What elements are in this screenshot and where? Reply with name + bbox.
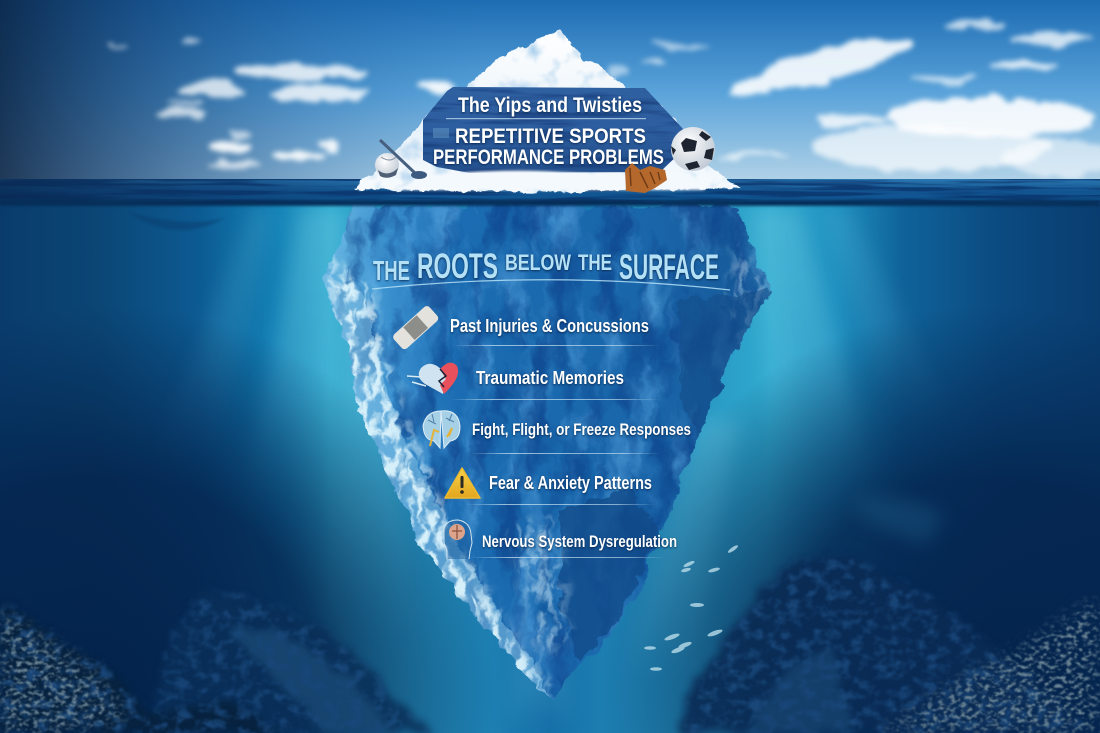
item: Fear and Anxiety Patterns: Fear & Anxiety Patterns [489,473,652,493]
water surface band [0,179,1100,206]
title: The Yips and Twisties: The Yips and Twisties [458,94,642,117]
heading: Repetitive Sports Performance Problems: PERFORMANCE PROBLEMS [433,146,664,169]
icon: baseball glove [625,163,667,193]
sky background [0,0,1100,185]
heading: The Roots Below the Surface: ROOTS [417,247,498,286]
heading underline [372,280,730,290]
item: Fight, Flight, or Freeze Responses [423,411,691,454]
item: Past Injuries and Concussions: Past Injuries & Concussions [450,316,649,336]
whale silhouette [128,212,225,230]
item: Traumatic Memories [407,363,660,400]
deep water shadows [0,200,1100,733]
iceberg tip above water [355,31,740,192]
item: Traumatic Memories: Traumatic Memories [476,368,624,388]
item: Fear and Anxiety Patterns [445,468,655,505]
underwater background [0,200,1100,733]
clouds left [110,40,453,169]
seabed rocks left [0,590,430,733]
heading: The Roots Below the Surface: THE [373,255,410,286]
item: Nervous System Dysregulation [444,520,677,559]
title plate [395,87,705,190]
heading: The Roots Below the Surface: BELOW [505,250,571,275]
heading: The Roots Below the Surface [373,247,719,287]
light rays [150,210,960,725]
heading: The Roots Below the Surface: THE [578,250,612,275]
heading: The Roots Below the Surface: SURFACE [619,248,719,287]
item: Fight, Flight, or Freeze Responses: Fight, Flight, or Freeze Responses [472,420,691,439]
item: Nervous System Dysregulation: Nervous System Dysregulation [482,532,677,551]
fish school [644,544,739,671]
heading: Repetitive Sports Performance Problems: REPETITIVE SPORTS [455,125,646,148]
icon: baseball [375,153,399,178]
seabed rocks right [678,495,1100,733]
clouds right [606,21,1100,176]
icon: soccer ball [671,127,715,171]
heading: Repetitive Sports Performance Problems [433,125,664,169]
icon: golf club [380,140,427,179]
iceberg underwater mass [320,200,780,705]
item: Past Injuries and Concussions [391,305,660,351]
